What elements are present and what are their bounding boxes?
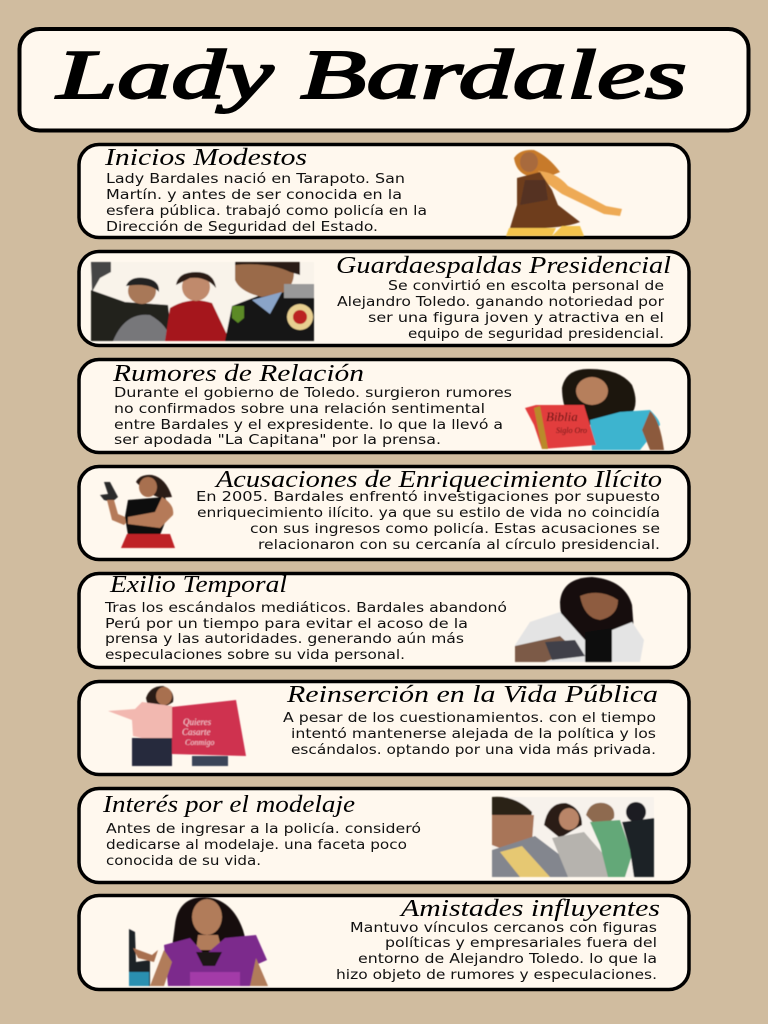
- text block: intentó mantenerse alejada de la política y los: [291, 727, 656, 742]
- text block: Se convirtió en escolta personal de: [388, 279, 664, 294]
- text block: En 2005. Bardales enfrentó investigaciones por supuesto: [196, 490, 660, 505]
- text block: [114, 386, 512, 448]
- text block: Lady Bardales nació en Tarapoto. San: [106, 172, 405, 187]
- photo: woman with pink banner: [108, 686, 246, 766]
- text block: prensa y las autoridades. generando aún más: [105, 632, 464, 647]
- panel: Exilio Temporal: [79, 572, 689, 668]
- text block: Dirección de Seguridad del Estado.: [106, 220, 378, 235]
- text block: Tras los escándalos mediáticos. Bardales abandonó: [104, 601, 507, 616]
- panel: Interés por el modelaje: [79, 788, 689, 882]
- text block: esfera pública. trabajó como policía en la: [106, 204, 427, 219]
- text block: con sus ingresos como policía. Estas acusaciones se: [250, 522, 660, 537]
- heading: Rumores de Relación: [112, 361, 364, 387]
- panel: Rumores de Relación: [79, 360, 689, 452]
- text block: escándalos. optando por una vida más privada.: [291, 743, 656, 758]
- text block: no confirmados sobre una relación sentimental: [114, 402, 485, 417]
- heading: Amistades influyentes: [399, 896, 660, 922]
- panel: Inicios Modestos: [79, 144, 689, 238]
- heading: Guardaespaldas Presidencial: [336, 253, 671, 279]
- photo: woman holding Bible: [525, 369, 664, 450]
- title panel: [20, 29, 748, 130]
- text block: [106, 172, 427, 235]
- photo: woman with pink banner: Conmigo: [185, 738, 214, 747]
- heading: Interés por el modelaje: [102, 792, 355, 818]
- panel: Guardaespaldas Presidencial: [79, 252, 689, 346]
- text block: [106, 822, 421, 869]
- text block: enriquecimiento ilícito. ya que su estilo de vida no coincidía: [197, 506, 660, 521]
- text block: relacionaron con su cercanía al círculo presidencial.: [258, 538, 660, 553]
- panel: Amistades influyentes: [79, 896, 689, 990]
- text block: Alejandro Toledo. ganando notoriedad por: [337, 295, 665, 310]
- text block: políticas y empresariales fuera del: [385, 936, 657, 951]
- title: Lady Bardales: [55, 37, 687, 114]
- text block: Perú por un tiempo para evitar el acoso de la: [105, 617, 468, 632]
- photo: woman looking at a device: [515, 577, 644, 662]
- text block: [196, 490, 660, 553]
- text block: hizo objeto de rumores y especulaciones.: [336, 968, 657, 983]
- photo: woman in purple blouse: [129, 897, 268, 986]
- text block: entre Bardales y el expresidente. lo que la llevó a: [114, 418, 503, 433]
- heading: Exilio Temporal: [109, 572, 287, 598]
- banner lettering: Quieres: [183, 717, 212, 727]
- text block: equipo de seguridad presidencial.: [408, 327, 664, 342]
- text block: ser una figura joven y atractiva en el: [368, 311, 664, 326]
- heading: Acusaciones de Enriquecimiento Ilícito: [214, 467, 662, 493]
- text block: [104, 601, 507, 663]
- photo: woman holding Bible: Siglo Oro: [556, 426, 587, 435]
- heading: Inicios Modestos: [104, 145, 307, 171]
- text block: [283, 711, 656, 758]
- text block: [337, 279, 665, 342]
- photo: woman with pistol: [100, 475, 175, 548]
- photo: officer and two women: [91, 262, 314, 341]
- panel: Acusaciones de Enriquecimiento Ilícito: [79, 466, 689, 560]
- text block: Durante el gobierno de Toledo. surgieron rumores: [114, 386, 512, 401]
- text block: A pesar de los cuestionamientos. con el tiempo: [283, 711, 656, 726]
- text block: entorno de Alejandro Toledo. lo que la: [358, 952, 657, 967]
- text block: especulaciones sobre su vida personal.: [105, 648, 405, 663]
- panel: Reinserción en la Vida Pública: [79, 682, 689, 774]
- text block: Mantuvo vínculos cercanos con figuras: [350, 921, 657, 936]
- text block: dedicarse al modelaje. una faceta poco: [106, 838, 407, 853]
- book label: Biblia: [546, 409, 578, 424]
- photo: woman with pink banner: Casarte: [182, 727, 211, 737]
- text block: Antes de ingresar a la policía. consideró: [106, 822, 421, 837]
- text block: [336, 921, 657, 983]
- heading: Reinserción en la Vida Pública: [286, 682, 658, 708]
- text block: Martín. y antes de ser conocida en la: [106, 188, 402, 203]
- text block: ser apodada "La Capitana" por la prensa.: [114, 433, 441, 448]
- photo: woman with men in suits: [492, 797, 654, 877]
- photo: woman in brown dress: [506, 150, 622, 236]
- text block: conocida de su vida.: [106, 854, 261, 869]
